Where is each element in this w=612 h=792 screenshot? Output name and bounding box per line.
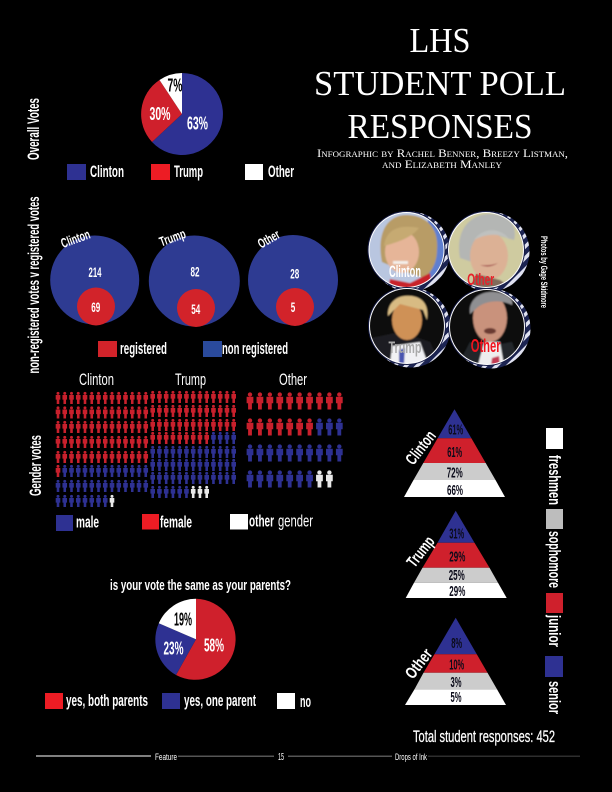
footer: Drops of Ink (395, 752, 427, 763)
pyramid: Clinton: 61% (447, 444, 462, 461)
circle chart: Other: 28 (290, 266, 299, 282)
pictogram: Trump gender (150, 391, 236, 498)
circle chart: Clinton (50, 227, 139, 326)
circle chart: Other: 5 (291, 299, 295, 315)
legend: gender: female (160, 512, 192, 532)
footer (36, 752, 580, 763)
legend: overall votes (67, 162, 294, 181)
title: RESPONSES (348, 107, 532, 146)
pyramid: Other: 3% (450, 674, 462, 691)
circle chart: Other: Other (255, 227, 283, 251)
photo: Clinton (368, 211, 450, 292)
circle chart: Trump: Trump (157, 226, 188, 249)
pie chart: parents: 23% (164, 638, 184, 658)
pictogram: Other gender (247, 392, 343, 488)
legend: registered: registered (120, 339, 167, 358)
heading: gender Other: Other (279, 370, 307, 389)
circle chart: Trump: 54 (191, 301, 200, 317)
pie chart: overall votes: 7% (168, 76, 182, 96)
photo: Stein: Other (467, 270, 494, 289)
pyramid: Clinton: 66% (447, 482, 463, 499)
circle chart: Clinton: Clinton (59, 227, 92, 251)
photo: Trump: Trump (388, 338, 422, 357)
title (314, 21, 566, 146)
legend: class year: junior (545, 614, 564, 647)
pie chart: parents: 19% (174, 610, 192, 630)
heading: gender Clinton: Clinton (79, 370, 114, 389)
circle chart: Clinton: 69 (91, 299, 100, 315)
circle chart: Clinton: 214 (88, 264, 102, 280)
photo credit: Photos by Gage Skidmore (538, 236, 549, 308)
legend: parents: yes, one parent (184, 691, 256, 710)
circle chart: Trump (149, 226, 240, 327)
legend: class year: sophomore (545, 531, 564, 588)
legend: class year (545, 428, 564, 714)
pie chart: parents (155, 599, 236, 680)
legend: registered (98, 339, 288, 358)
credits: and Elizabeth Manley (382, 159, 502, 171)
photo: Stein (447, 211, 530, 292)
pyramid: Trump: Trump (404, 533, 439, 571)
heading: gender Trump: Trump (175, 370, 206, 389)
pyramid: Clinton: 61% (448, 422, 463, 438)
title: LHS (410, 21, 470, 60)
circle chart: Trump: 82 (190, 264, 200, 280)
photo: Clinton: Clinton (389, 262, 421, 281)
title: STUDENT POLL (314, 64, 566, 103)
pyramid: Trump: 25% (449, 567, 465, 584)
circle chart: Other (248, 227, 338, 326)
legend: class year: freshmen (545, 455, 564, 505)
photo: Johnson (448, 288, 530, 368)
heading: overall votes: Overall Votes (25, 98, 43, 160)
legend: gender: male (76, 512, 99, 532)
pie chart: overall votes (141, 73, 223, 155)
heading: parents question: is your vote the same as your parents? (110, 578, 291, 594)
legend: overall votes: Clinton (90, 162, 124, 181)
pyramid: Other: 8% (451, 635, 462, 652)
legend: parents: yes, both parents (66, 691, 148, 710)
legend: gender: other (249, 512, 274, 530)
legend: overall votes: Trump (174, 162, 203, 181)
pyramid: Trump (404, 511, 507, 600)
heading: registered votes: non-registered votes v registered votes (26, 196, 43, 374)
pyramid: Clinton: 72% (447, 464, 463, 482)
pie chart: overall votes: 30% (150, 104, 170, 124)
photo: Trump (368, 287, 450, 368)
pyramid: Trump: 29% (449, 548, 465, 566)
pyramid: Other (402, 618, 506, 706)
pyramid: Clinton: Clinton (402, 427, 440, 468)
legend: gender (56, 512, 313, 532)
legend: parents (45, 691, 311, 711)
pyramid: Other: 10% (449, 656, 464, 674)
pictogram: Clinton gender (56, 392, 148, 507)
pie chart: parents: 58% (204, 636, 224, 656)
legend: parents: no (300, 692, 311, 711)
pyramid: Other: Other (402, 645, 437, 682)
footer: 15 (278, 752, 284, 763)
photo: Johnson: Other (471, 336, 501, 356)
legend: gender: gender (278, 512, 313, 530)
pie chart: overall votes: 63% (187, 114, 208, 134)
legend: registered: non registered (222, 339, 288, 358)
footer: Feature (155, 752, 177, 763)
pyramid: Other: 5% (450, 689, 462, 706)
legend: class year: senior (545, 681, 564, 714)
pyramid: Trump: 31% (449, 526, 464, 542)
pyramid: Clinton (402, 409, 505, 499)
heading: gender votes: Gender votes (27, 435, 45, 496)
credits (317, 148, 568, 171)
legend: overall votes: Other (268, 162, 294, 181)
credits: Infographic by Rachel Benner, Breezy Listman, (317, 148, 568, 160)
pyramid: Trump: 29% (449, 583, 465, 600)
